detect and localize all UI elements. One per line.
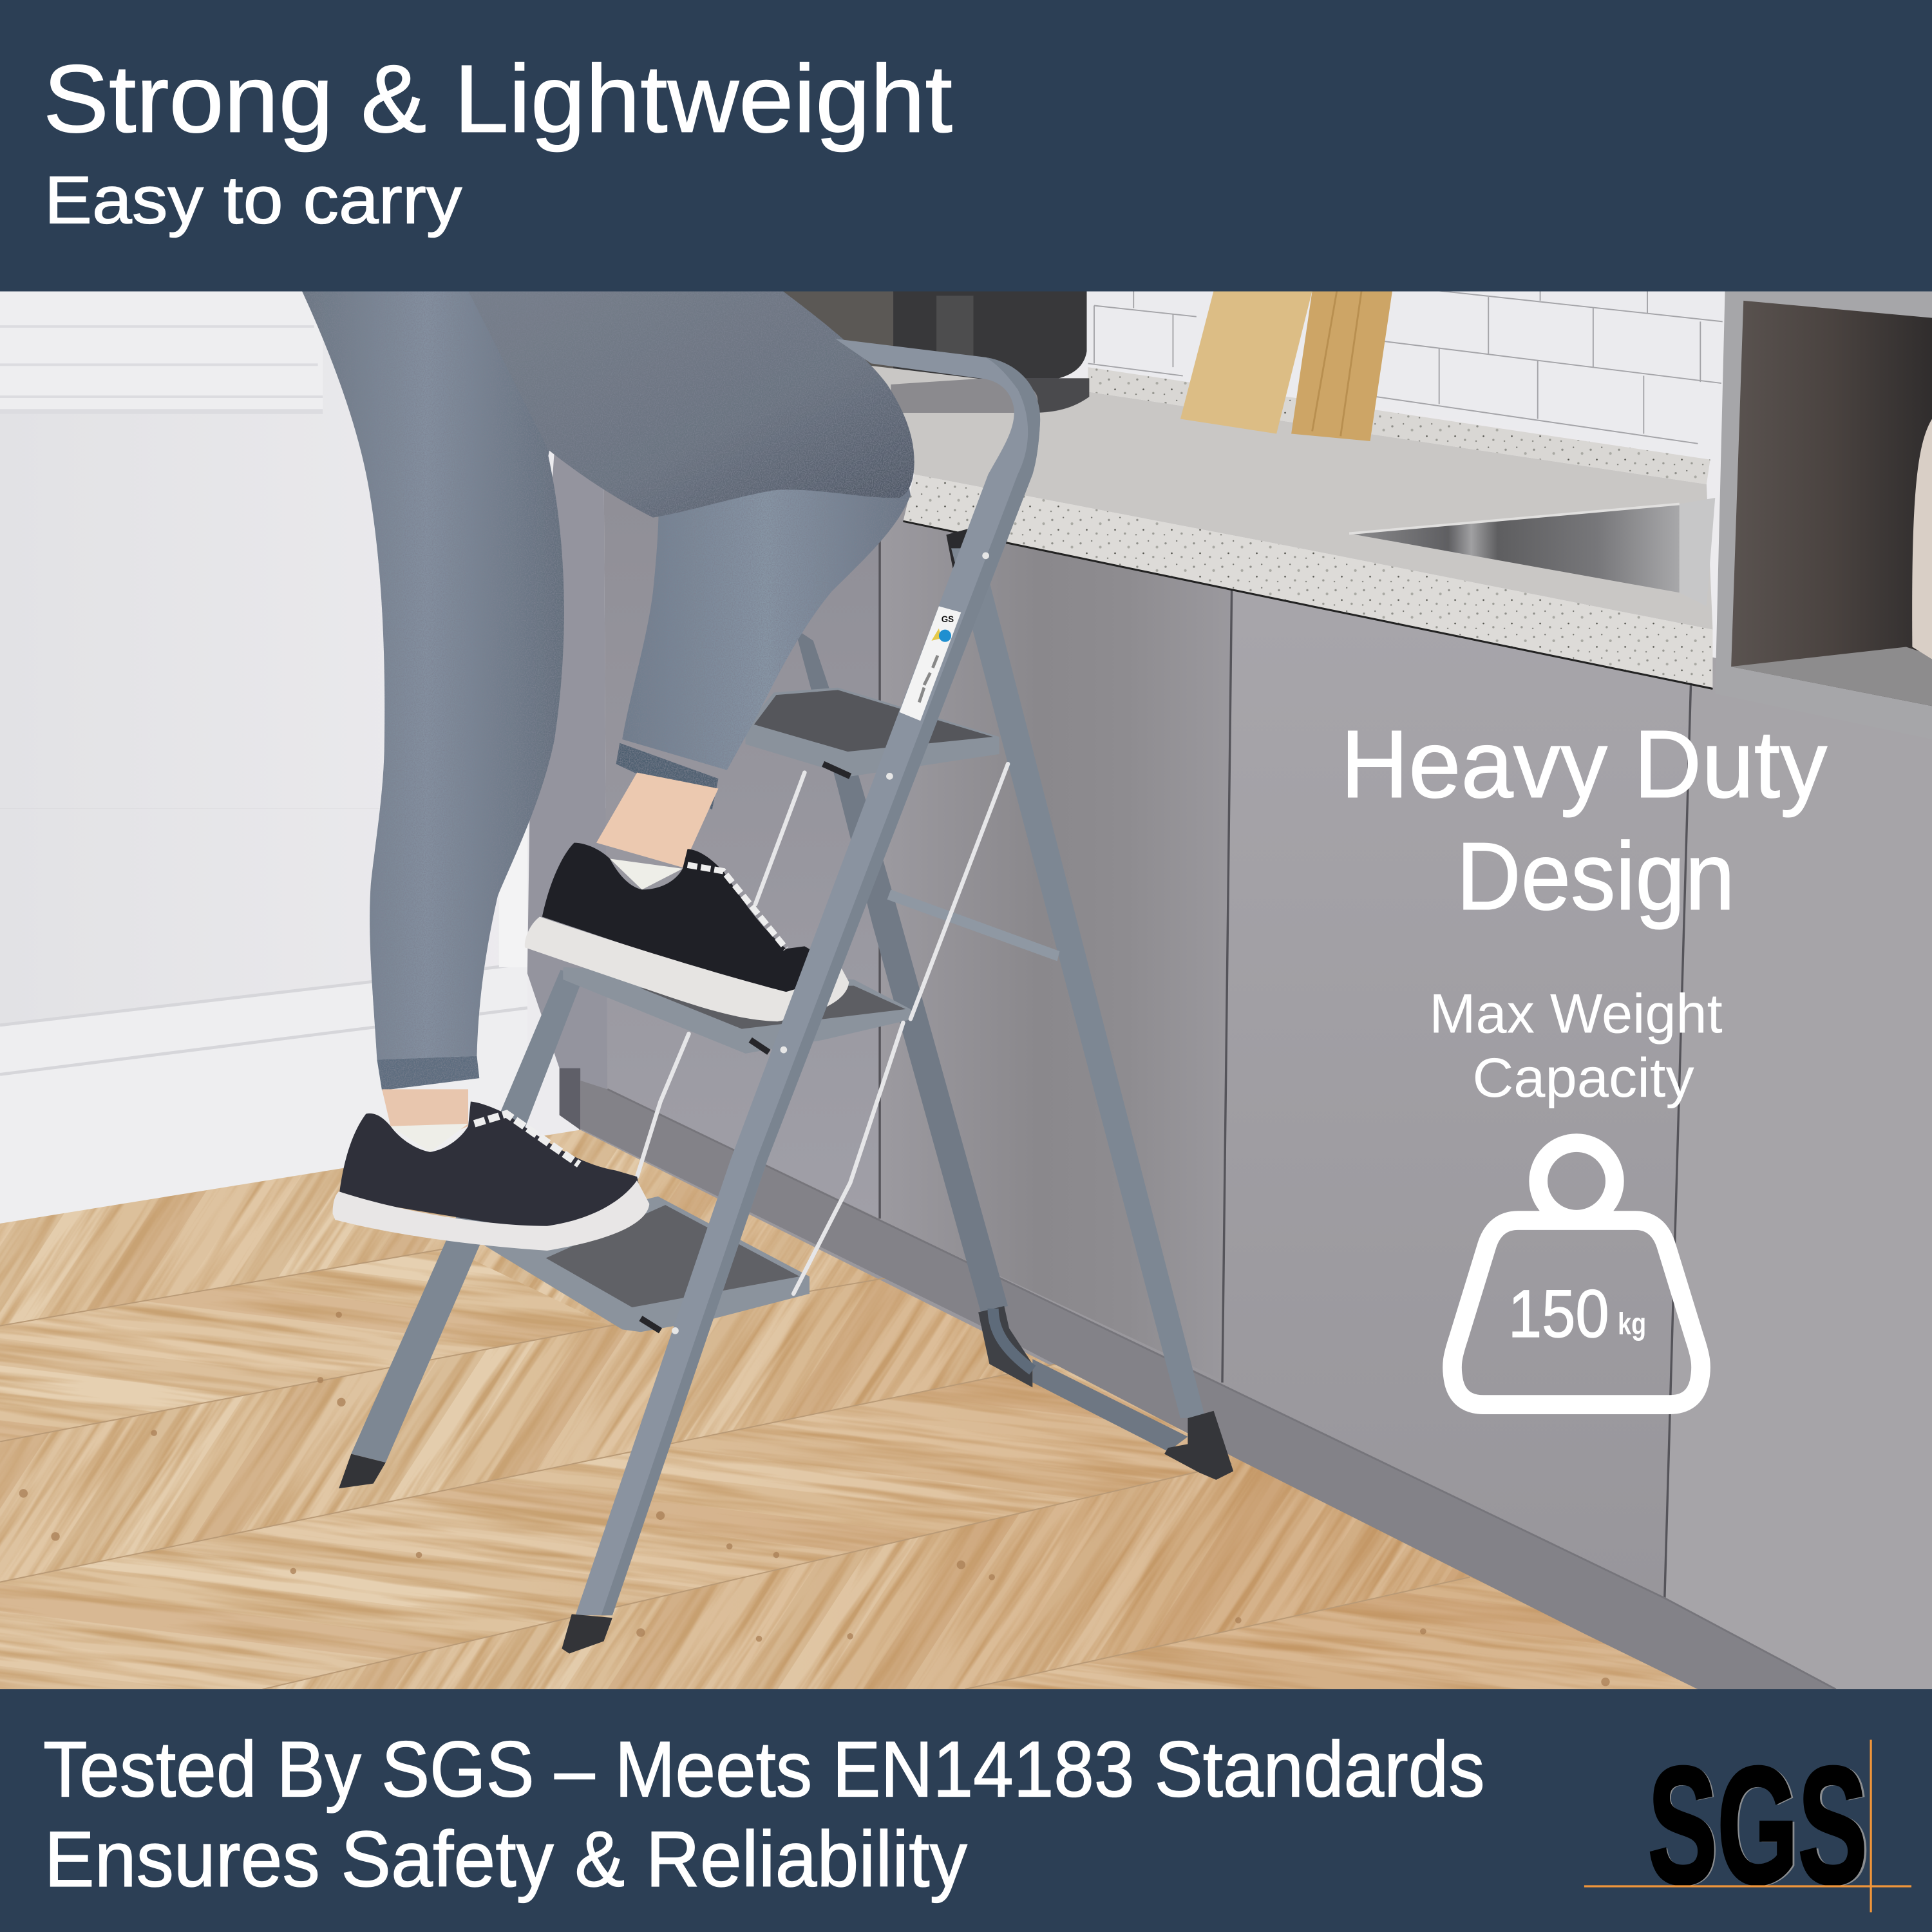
upper foot and sneaker bbox=[525, 773, 849, 1021]
bottom step bbox=[477, 1197, 810, 1332]
safety sticker on ladder: GS bbox=[942, 614, 954, 624]
standing leg cuff bbox=[377, 1056, 479, 1090]
person legs in grey leggings bbox=[302, 291, 914, 1090]
safety sticker on ladder bbox=[900, 606, 961, 721]
reliability line: Ensures Safety & Reliability bbox=[44, 1815, 967, 1903]
appliance base dark right end bbox=[1010, 378, 1089, 413]
top banner bbox=[0, 0, 1932, 291]
design heading: Design bbox=[1456, 822, 1735, 930]
capacity label: Capacity bbox=[1472, 1047, 1694, 1109]
ladder right wires bbox=[793, 764, 1008, 1294]
heavy duty heading: Heavy Duty bbox=[1341, 710, 1828, 818]
stone worktop bbox=[862, 365, 1712, 689]
open shelf unit bbox=[1715, 291, 1932, 739]
wall with moulding and skirting bbox=[0, 291, 1725, 1226]
heavy duty callout bbox=[1341, 710, 1828, 1405]
bottom banner bbox=[0, 1689, 1932, 1932]
scene backdrop bbox=[0, 291, 1932, 1689]
raised thigh and knee bbox=[468, 291, 914, 518]
top step bbox=[746, 688, 999, 776]
backsplash tiles bbox=[1084, 291, 1725, 462]
lower foot and sneaker bbox=[333, 1089, 649, 1251]
stainless steel sink bbox=[1349, 498, 1715, 606]
ladder front rail and handle bbox=[562, 339, 1040, 1654]
max weight label: Max Weight bbox=[1429, 983, 1723, 1045]
raised leg cuff bbox=[616, 743, 718, 810]
herringbone wood floor bbox=[0, 1130, 1698, 1689]
photo scene: kitchen with step ladder bbox=[0, 291, 1932, 1689]
icon: weight 150 kg: kg bbox=[1618, 1307, 1646, 1341]
raised lower leg bbox=[622, 468, 911, 770]
subtitle: Easy to carry bbox=[44, 162, 462, 238]
main title: Strong & Lightweight bbox=[43, 45, 952, 153]
standing leg bbox=[302, 291, 579, 1059]
icon: weight 150 kg: 150 bbox=[1508, 1276, 1609, 1352]
ladder rear frame bbox=[339, 527, 1233, 1488]
standards line: Tested By SGS – Meets EN14183 Standards bbox=[43, 1725, 1484, 1814]
appliance base bbox=[891, 378, 1089, 413]
dark kettle appliance on counter bbox=[773, 291, 1087, 390]
icon: weight 150 kg bbox=[1452, 1143, 1701, 1405]
wooden chopping boards bbox=[1180, 291, 1392, 441]
middle step bbox=[563, 967, 913, 1054]
kitchen cabinets bbox=[527, 450, 1932, 1689]
ladder wires bbox=[637, 773, 804, 1177]
